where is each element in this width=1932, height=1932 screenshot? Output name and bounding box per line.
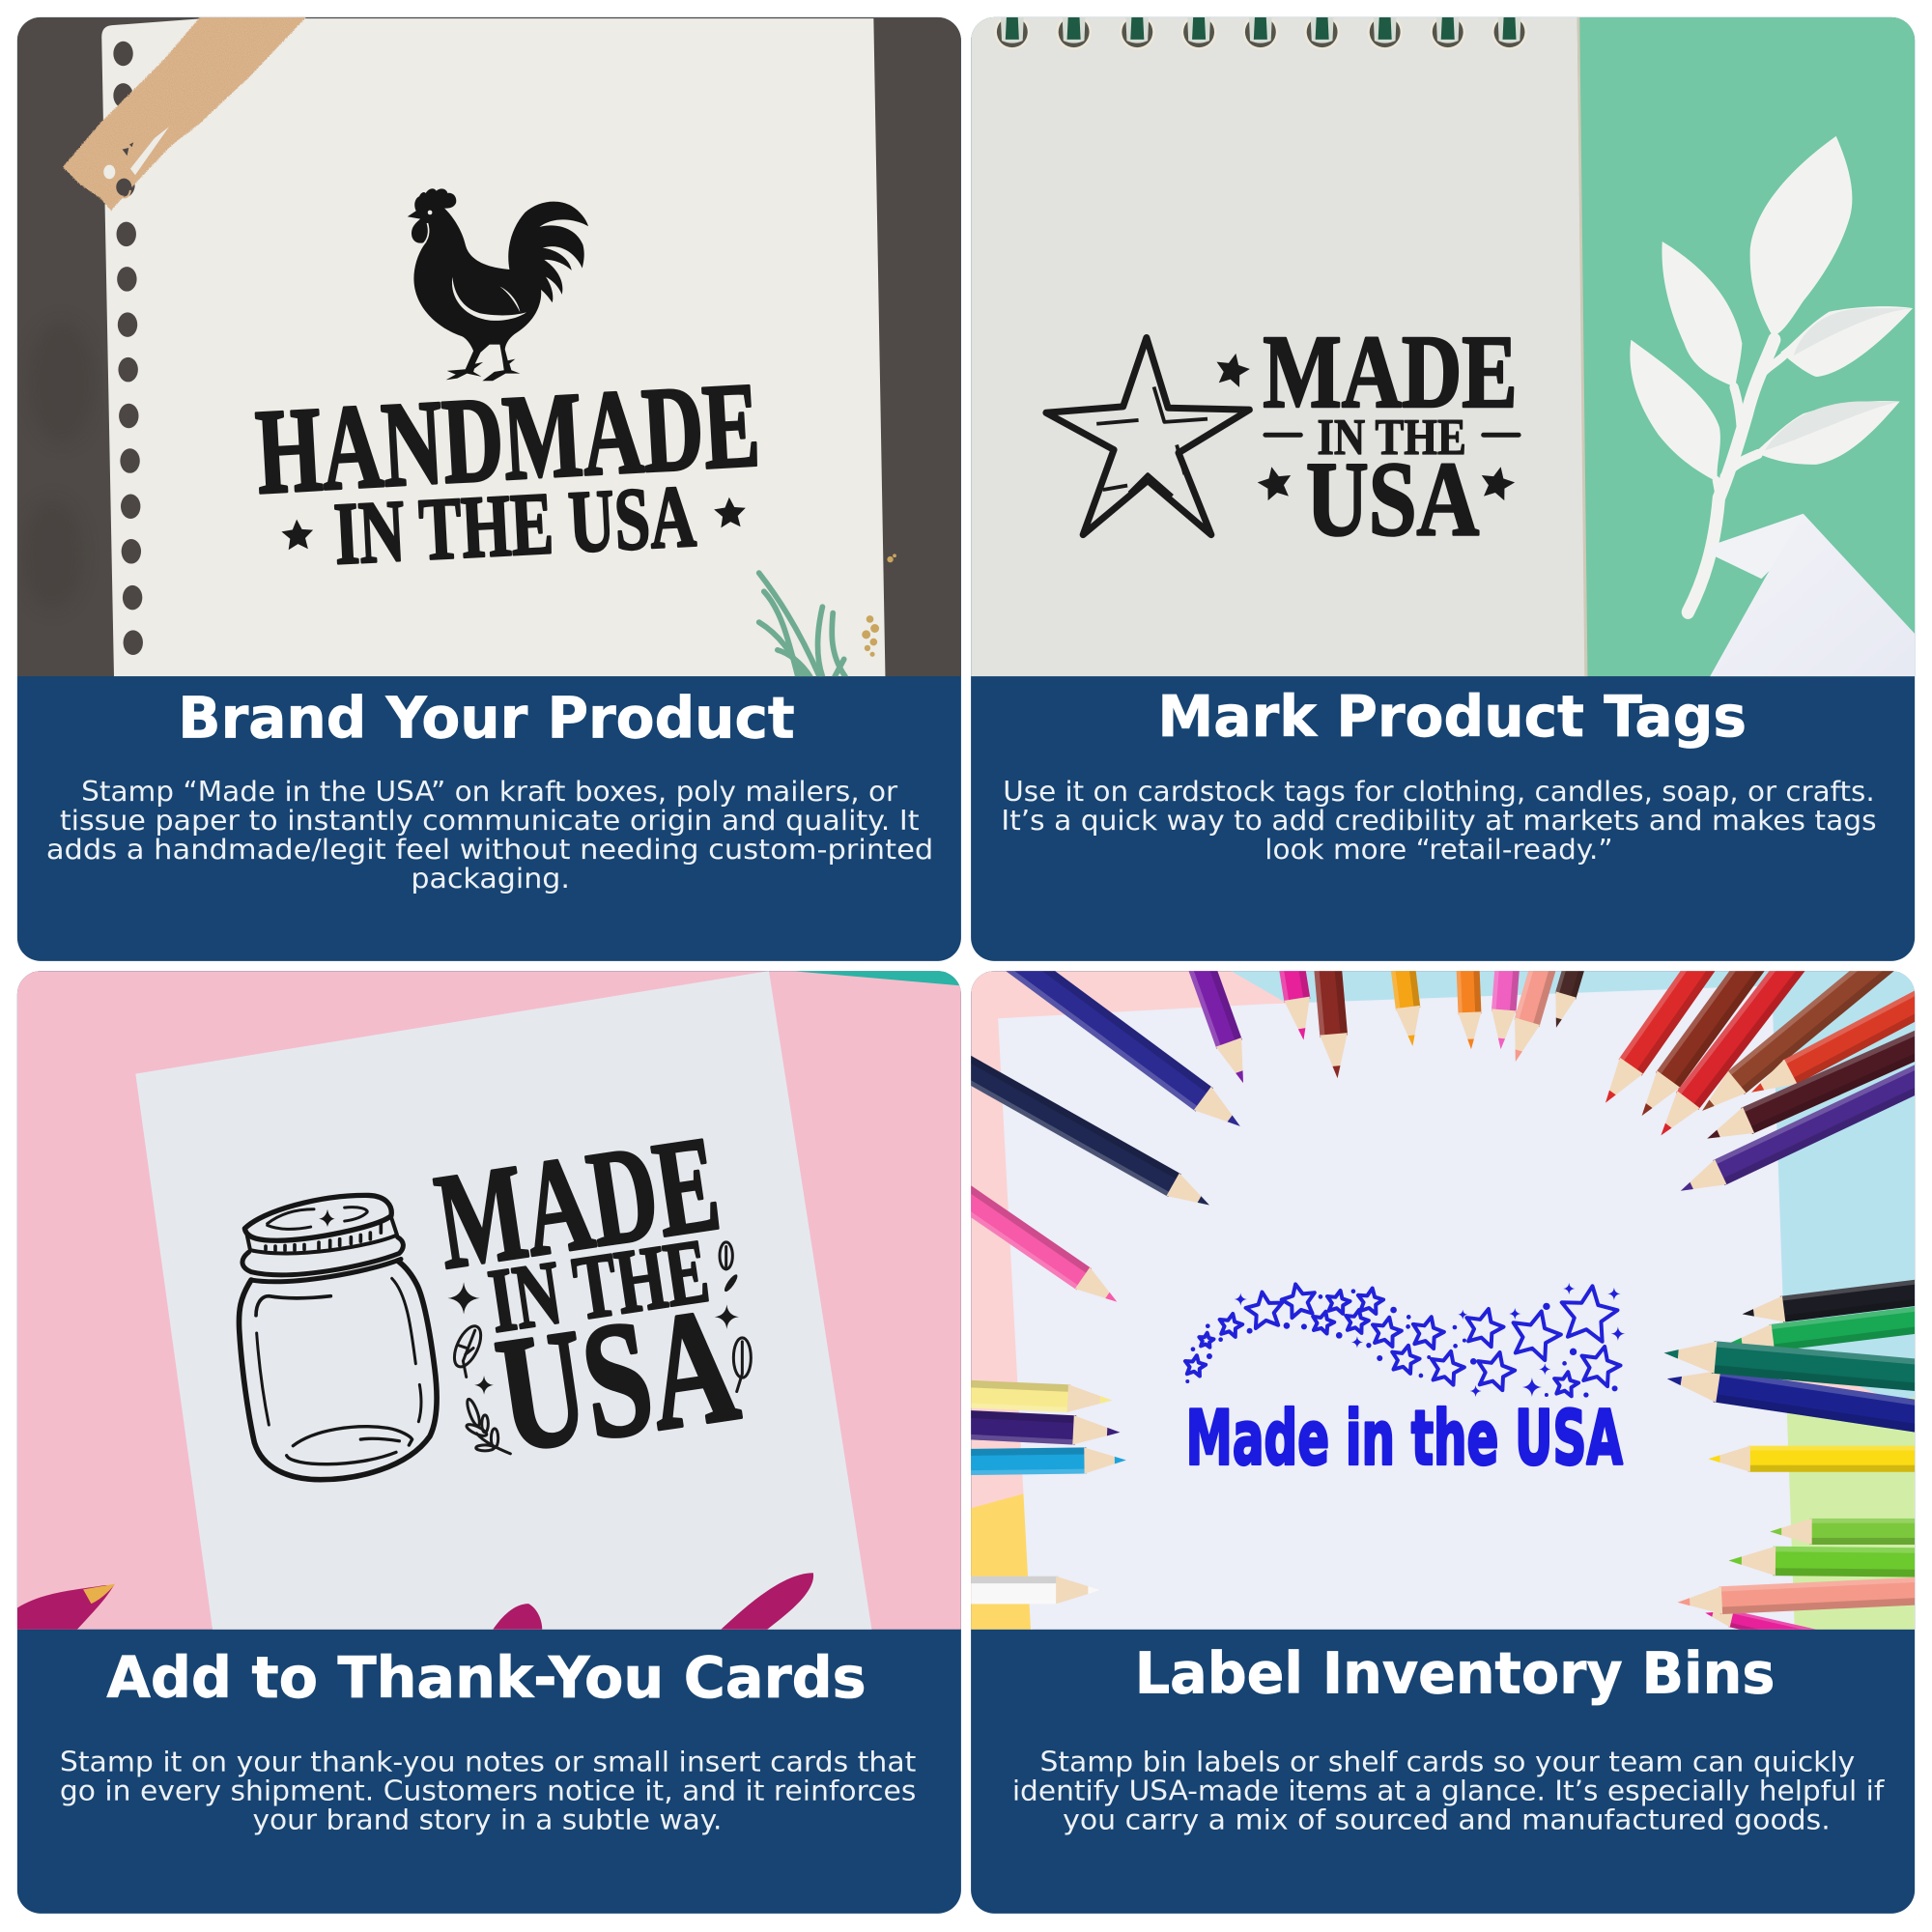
stamp stars [281,497,747,551]
stamp: mason jar [239,1195,437,1480]
pencils: top [1279,971,1584,1078]
pencils: right [1662,1238,1932,1694]
pencils: top right [1605,971,1915,1191]
stamp text: in the: IN THE [1318,410,1466,466]
heading: Brand Your Product [178,685,795,751]
stamp text: usa: USA [487,1272,748,1487]
stamp: star outline [1046,337,1249,535]
glitter specks [862,554,896,657]
heading: Label Inventory Bins [1135,1641,1775,1707]
pencils: top left [971,971,1243,1302]
stamp text: handmade: HANDMADE [253,357,763,520]
body text: Stamp “Made in the USA” on kraft boxes, poly mailers, or [81,775,897,808]
pine sprig [759,573,845,676]
body text: packaging. [411,862,570,895]
heading: Add to Thank-You Cards [106,1645,867,1711]
photo: colored pencils around paper [971,971,1915,1630]
stamp text: made in the usa: Made in the USA [1186,1395,1623,1482]
pencils: left [549,1363,1126,1604]
body text [1012,1746,1885,1836]
heading: Mark Product Tags [1157,684,1747,750]
stamp text: usa: USA [1306,440,1479,558]
panel: add to thank-you cards [17,971,961,1914]
stamp ornaments [447,1273,740,1395]
panel: label inventory bins [971,971,1915,1914]
body text [60,1746,916,1836]
stamp lettering group [427,1107,751,1487]
photo: spiral notepad on green background [971,14,1919,723]
panel: mark product tags [971,14,1919,961]
spiral binding [994,14,1527,50]
photo: notebook paper on dark background [17,15,961,676]
flower petals [17,1573,813,1630]
stamp: rooster [408,188,588,381]
body text: tissue paper to instantly communicate origin and quality. It [60,804,920,837]
photo: card on pink background [17,971,961,1630]
body text: Use it on cardstock tags for clothing, candles, soap, or crafts. [1003,775,1875,808]
body text: Stamp bin labels or shelf cards so your team can quickly [1040,1746,1855,1778]
paper leaf branch [1630,136,1913,612]
stamp text: in the: IN THE [483,1221,715,1352]
body text [1001,775,1877,866]
body text: adds a handmade/legit feel without needing custom-printed [46,833,933,866]
origami paper [1710,514,1915,676]
body text: identify USA-made items at a glance. It’s especially helpful if [1012,1775,1885,1807]
stamp text: made: MADE [1263,314,1518,430]
panel: brand your product [17,15,961,961]
body text: go in every shipment. Customers notice it, and it reinforces [60,1775,916,1807]
gold glitter tape [63,15,307,211]
stamp text: in the usa: IN THE USA [331,467,697,583]
body text: It’s a quick way to add credibility at markets and makes tags [1001,804,1877,837]
body text: your brand story in a subtle way. [252,1804,722,1836]
body text: look more “retail-ready.” [1264,833,1613,866]
petal tip [83,1584,115,1604]
stamp text: made: MADE [427,1107,728,1298]
body text [46,775,933,895]
stamp ornaments [1212,350,1521,502]
stamp: star swoosh [1183,1281,1625,1398]
body text: Stamp it on your thank-you notes or small insert cards that [60,1746,916,1778]
body text: you carry a mix of sourced and manufactured goods. [1063,1804,1831,1836]
